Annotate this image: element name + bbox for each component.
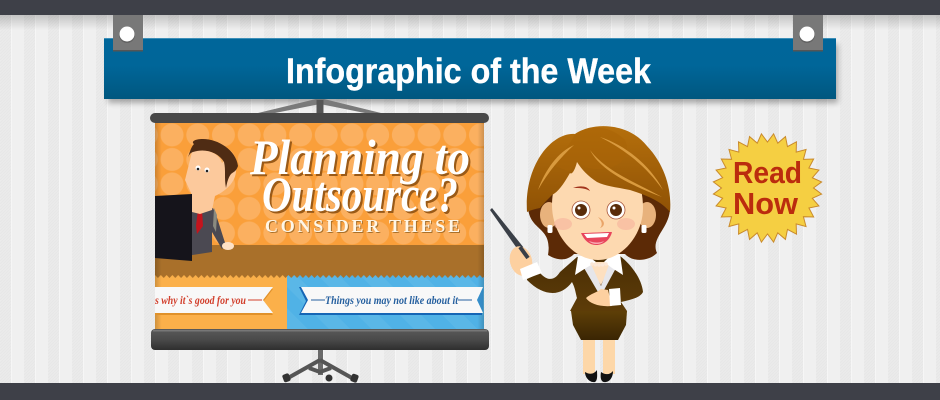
skirt	[571, 311, 627, 340]
eyebrow	[573, 186, 590, 191]
right ribbon: Things you may not like about it	[325, 293, 459, 307]
bottom bar	[0, 383, 940, 400]
arm hand on belly	[586, 288, 621, 306]
right ribbon	[299, 287, 483, 315]
hand	[222, 242, 234, 250]
man character	[155, 139, 238, 261]
pointer stick	[490, 208, 528, 257]
heading: Infographic of the Week	[286, 52, 651, 91]
left ribbon: s why it`s good for you	[154, 293, 246, 307]
face	[552, 155, 643, 260]
ears	[540, 202, 656, 228]
title text: Outsource?	[262, 166, 458, 222]
title text: Outsource?	[264, 168, 460, 224]
earrings	[548, 225, 646, 233]
title text	[250, 140, 470, 214]
hair	[188, 139, 238, 188]
projector screen	[150, 99, 489, 383]
face	[185, 150, 236, 214]
subtitle: CONSIDER THESE	[265, 216, 460, 236]
title text: Planning to	[251, 131, 472, 187]
banner: Infographic of the Week	[104, 38, 838, 103]
raised hand	[506, 244, 536, 278]
screen image	[154, 123, 484, 329]
starburst	[707, 128, 828, 248]
stand	[282, 349, 359, 383]
top bracket	[258, 99, 381, 114]
bottom roller	[151, 329, 489, 350]
badge: Read Now	[707, 128, 828, 248]
right hanging tab	[793, 15, 823, 52]
blouse	[575, 254, 623, 292]
orange lower panel	[155, 275, 287, 329]
badge text: Now	[733, 186, 799, 221]
cheeks	[554, 218, 635, 230]
blue lower panel	[287, 275, 484, 329]
jacket	[527, 256, 643, 311]
presenter woman	[490, 126, 670, 382]
necklace	[590, 262, 608, 267]
shoes	[585, 370, 613, 382]
pointer grip	[520, 247, 528, 258]
monitor	[155, 194, 192, 261]
tie	[196, 213, 203, 234]
left hanging tab	[113, 15, 143, 52]
subtitle	[266, 220, 460, 233]
title text: Planning to	[249, 129, 470, 185]
top roller	[150, 113, 489, 123]
nose	[598, 217, 604, 228]
subtitle: CONSIDER THESE	[266, 217, 461, 237]
legs	[583, 338, 615, 374]
mouth	[581, 232, 612, 245]
badge text	[733, 155, 802, 221]
eyes	[572, 201, 625, 219]
brown desk band	[155, 245, 484, 275]
badge text: Read	[733, 155, 802, 190]
cuff left	[520, 262, 542, 280]
eyes	[196, 166, 200, 170]
top bar	[0, 0, 940, 30]
suit	[192, 208, 225, 255]
front hair	[527, 126, 670, 212]
back hair	[528, 180, 670, 260]
left ribbon	[154, 287, 273, 315]
